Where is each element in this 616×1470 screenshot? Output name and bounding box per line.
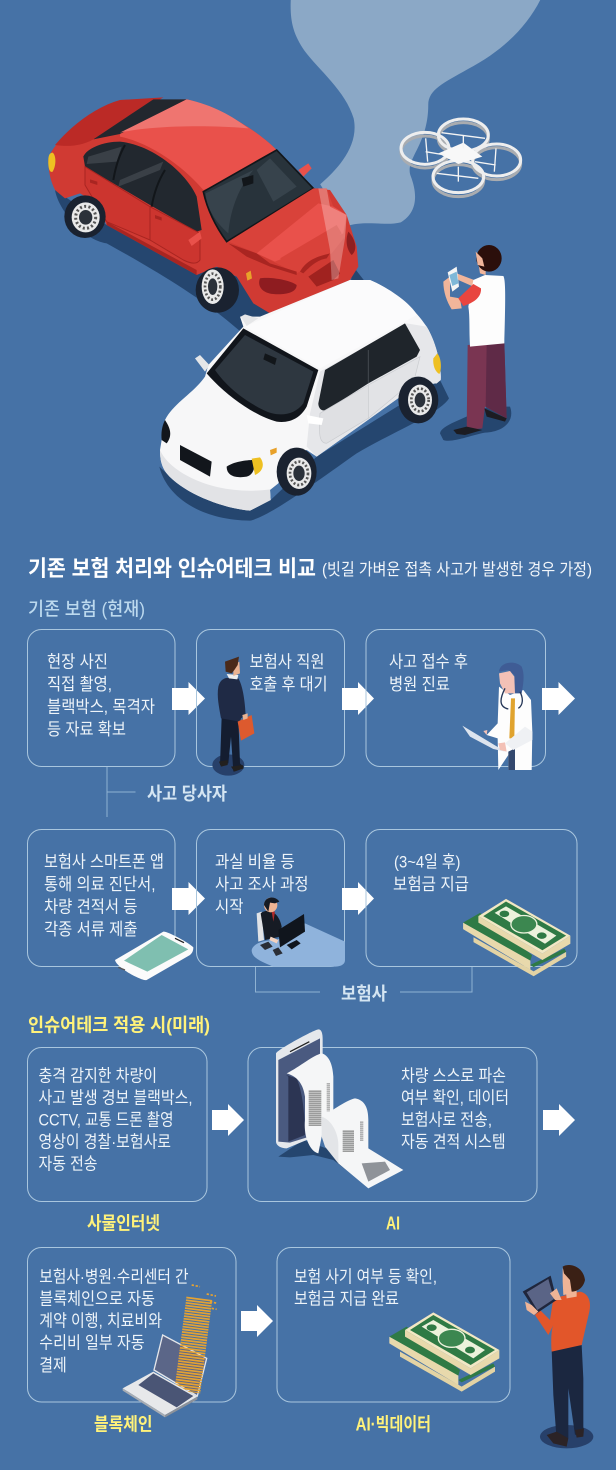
wheels (64, 195, 239, 313)
title main: 기존 보험 처리와 인슈어테크 비교 (28, 556, 316, 581)
panel: hospital (366, 630, 546, 770)
red car (48, 97, 365, 337)
person taking a phone photo (440, 245, 511, 441)
panel: insurer staff (196, 630, 344, 776)
panel text: 과실 비율 등 (215, 852, 295, 872)
drone (401, 119, 521, 197)
icon: businessman (212, 657, 254, 776)
panel text: 블랙박스, 목격자 (47, 698, 155, 716)
panel text (294, 1268, 437, 1308)
panel text: 보험사·병원·수리센터 간 (39, 1268, 189, 1286)
panel: payment (366, 830, 577, 976)
panel text (250, 652, 328, 694)
arrow (212, 1104, 244, 1136)
panel text (47, 652, 155, 739)
arrow (342, 882, 374, 915)
panel text: 보험금 지급 완료 (294, 1290, 399, 1308)
panel text: 영상이 경찰·보험사로 (38, 1132, 171, 1152)
panel text: 차량 견적서 등 (44, 898, 138, 916)
panel text: 통해 의료 진단서, (44, 875, 156, 894)
label: AI big data: AI·빅데이터 (356, 1414, 431, 1434)
icon: phone with receipt (276, 1029, 403, 1188)
label text: 보험사 (341, 984, 387, 1004)
panel text: (3~4일 후) (394, 852, 460, 872)
heading: insurtech future: 인슈어테크 적용 시(미래) (28, 1014, 210, 1036)
white car (159, 280, 449, 521)
arrow (241, 1305, 273, 1337)
icon: office worker (252, 898, 345, 967)
panel text (44, 852, 164, 939)
label: blockchain: 블록체인 (94, 1414, 152, 1434)
icon: doctor (462, 663, 532, 770)
arrow (543, 1104, 575, 1136)
panel text: 보험사로 전송, (401, 1110, 492, 1130)
panel text: 사고 접수 후 (389, 652, 468, 672)
panel text: 각종 서류 제출 (44, 920, 138, 939)
label: accident party (107, 767, 227, 817)
panel: AI big data (277, 1248, 510, 1402)
panel text (215, 852, 308, 916)
icon: money stacks (463, 899, 570, 976)
title note: (빗길 가벼운 접촉 사고가 발생한 경우 가정) (322, 560, 592, 579)
panel text (39, 1268, 189, 1375)
panel text: 보험사 스마트폰 앱 (44, 852, 164, 872)
panel text: 자동 견적 시스템 (401, 1132, 506, 1152)
panel text (401, 1066, 509, 1152)
panel text: 보험금 지급 (393, 875, 469, 894)
label: IoT: 사물인터넷 (87, 1214, 160, 1234)
smoke over hood (318, 188, 347, 280)
arrow (542, 682, 575, 715)
wheels (277, 377, 438, 496)
panel: on-site evidence (28, 630, 175, 766)
panel text: 등 자료 확보 (47, 720, 126, 739)
panel text: 블록체인으로 자동 (39, 1290, 155, 1308)
panel text: 여부 확인, 데이터 (401, 1088, 509, 1108)
panel: submit documents (28, 830, 175, 966)
heading: current insurance: 기존 보험 (현재) (28, 598, 145, 620)
panel text: 결제 (39, 1356, 67, 1375)
icon: money stacks (389, 1312, 499, 1392)
panel text: 병원 진료 (389, 675, 450, 694)
panel text: 자동 전송 (38, 1154, 98, 1174)
arrow (172, 682, 205, 715)
hero illustration: car accident scene (48, 0, 540, 521)
panel text: 사고 발생 경보 블랙박스, (38, 1088, 192, 1108)
panel text: 시작 (215, 898, 244, 916)
icon: smartphone (115, 932, 193, 980)
icon: laptop with data stream (123, 1285, 217, 1417)
panel text: 차량 스스로 파손 (401, 1066, 506, 1086)
panel: investigation (196, 830, 345, 967)
panel text: 직접 촬영, (47, 675, 112, 694)
panel text (389, 652, 468, 694)
panel text: 호출 후 대기 (250, 675, 328, 694)
arrow (342, 682, 374, 715)
panel text: 보험사 직원 (250, 652, 324, 672)
icon: man with tablet (523, 1265, 593, 1448)
panel: blockchain (28, 1248, 236, 1402)
panel text: 현장 사진 (47, 652, 108, 672)
panel text: 충격 감지한 차량이 (38, 1066, 157, 1086)
panel text: CCTV, 교통 드론 촬영 (38, 1110, 174, 1130)
label text: 사고 당사자 (147, 784, 227, 804)
title (28, 556, 592, 581)
smoke plume (291, 0, 540, 226)
panel text: 수리비 일부 자동 (39, 1334, 145, 1352)
panel text: 보험 사기 여부 등 확인, (294, 1268, 437, 1286)
arrow (172, 882, 205, 915)
panel text (38, 1066, 192, 1174)
label: insurer (256, 967, 472, 1004)
panel: internet of things (28, 1048, 207, 1202)
panel text (393, 852, 469, 894)
panel text: 사고 조사 과정 (215, 875, 308, 894)
panel text: 계약 이행, 치료비와 (39, 1312, 162, 1330)
label: AI: AI (386, 1214, 400, 1234)
panel: AI (248, 1029, 537, 1202)
